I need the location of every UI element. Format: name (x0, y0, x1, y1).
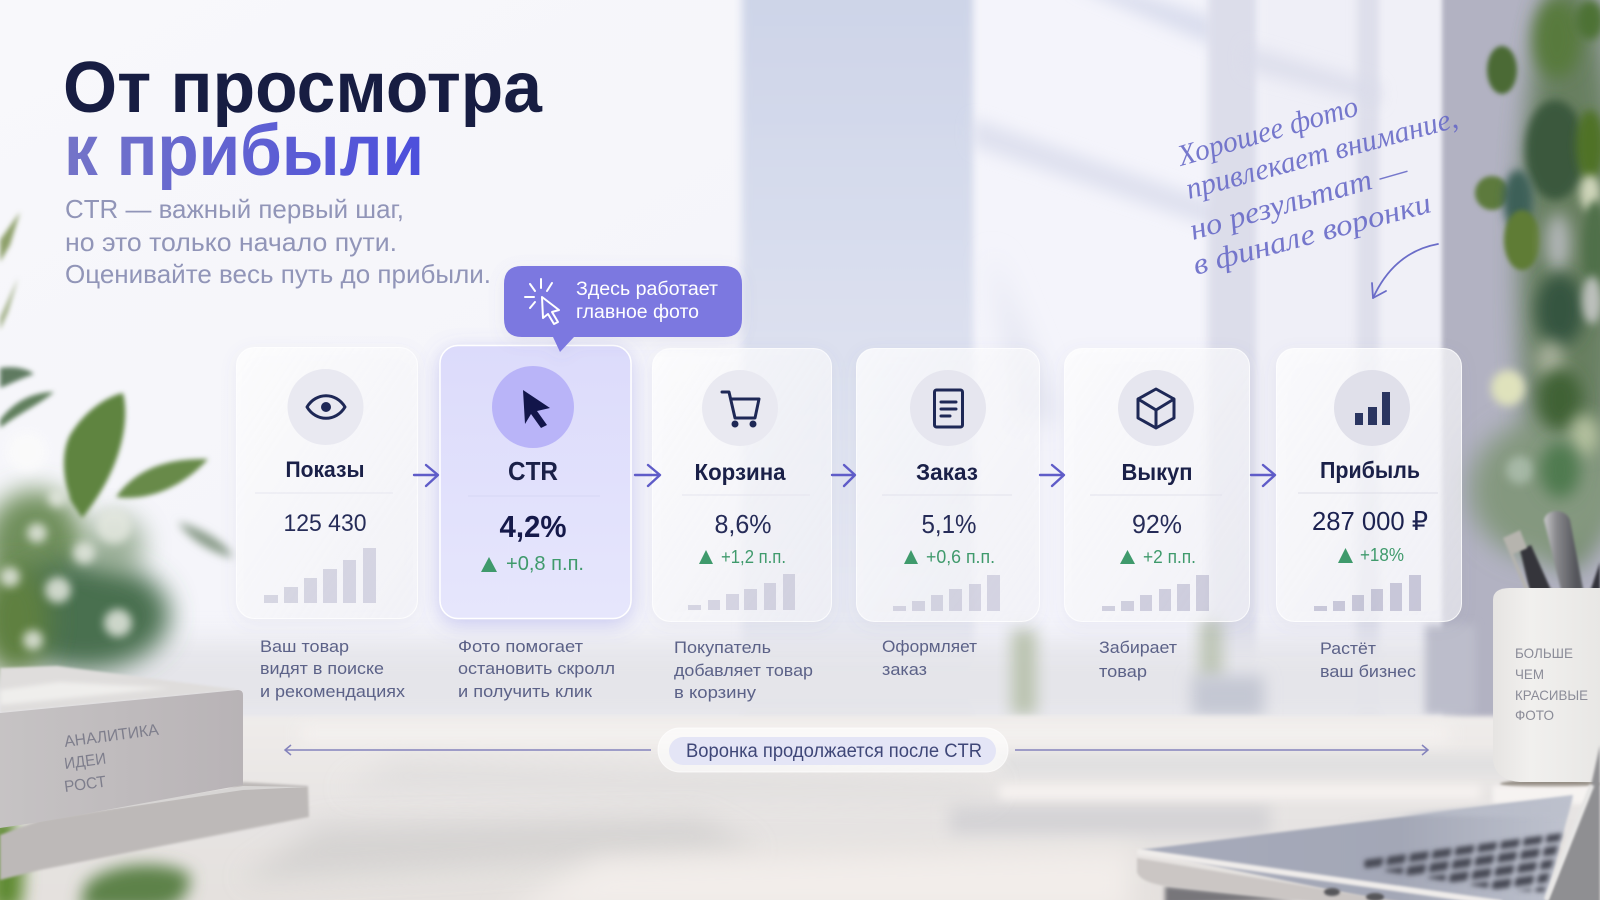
text: Корзина description: добавляет товар (674, 661, 813, 680)
card: Прибыль (1276, 348, 1462, 622)
icon: eye (288, 369, 364, 445)
icon: cursor (492, 366, 574, 448)
text: CTR description: и получить клик (458, 682, 593, 701)
arrow: Выкуп to Прибыль (1251, 465, 1275, 486)
delta: +0,8 п.п. (506, 553, 584, 575)
subtitle: Оценивайте весь путь до прибыли. (65, 259, 491, 289)
funnel continuation pill (658, 728, 1008, 772)
bar chart (1102, 575, 1209, 611)
table (0, 716, 1600, 900)
pen cup with pens (1493, 511, 1600, 804)
heading: Выкуп (1122, 459, 1192, 485)
callout: main photo: главное фото (576, 302, 699, 323)
book stack with spine labels (0, 666, 309, 880)
callout: main photo: Здесь работает (576, 279, 718, 300)
text: CTR description: остановить скролл (458, 659, 615, 678)
text: Показы description: видят в поиске (260, 659, 384, 678)
text: Показы description: Ваш товар (260, 637, 349, 656)
value: 8,6% (714, 509, 772, 539)
handwritten note: Хорошее фото (1173, 90, 1362, 173)
laptop (1137, 745, 1600, 900)
card: Заказ (856, 348, 1040, 622)
cup label text: КРАСИВЫЕ (1515, 687, 1588, 703)
heading: Показы (286, 457, 364, 482)
value: 125 430 (284, 510, 366, 537)
card: CTR highlighted (440, 346, 631, 618)
bottom-left blurred foliage (0, 805, 190, 900)
handwritten note: привлекает внимание, (1182, 101, 1461, 206)
icon: click burst (525, 279, 559, 324)
text: Прибыль description: ваш бизнес (1320, 662, 1417, 681)
delta: +18% (1360, 545, 1404, 565)
text: Прибыль description: Растёт (1320, 639, 1376, 658)
text: Выкуп description: Забирает (1099, 638, 1177, 657)
arrow: handwritten pointer (1372, 244, 1438, 298)
handwritten note (1173, 90, 1461, 282)
delta: +0,6 п.п. (926, 547, 995, 567)
funnel continuation pill: Воронка продолжается после CTR (686, 741, 982, 762)
value: 4,2% (500, 509, 566, 544)
icon: cart (702, 370, 778, 446)
handwritten note: в финале воронки (1189, 186, 1434, 282)
icon: document (910, 370, 986, 446)
value: 5,1% (922, 509, 976, 539)
arrow: Корзина to Заказ (832, 465, 855, 486)
icon: growth bars (1334, 370, 1410, 446)
arrow: CTR to Корзина (635, 465, 660, 486)
text: CTR description: Фото помогает (458, 637, 583, 656)
delta: +1,2 п.п. (721, 547, 786, 567)
book label text: АНАЛИТИКА (63, 722, 160, 751)
text: Заказ description: заказ (882, 660, 927, 679)
funnel continuation line left (285, 745, 651, 755)
right plant (1470, 0, 1600, 570)
cup label text: ЧЕМ (1515, 666, 1544, 682)
subtitle: но это только начало пути. (65, 227, 397, 257)
text: Корзина description: Покупатель (674, 638, 771, 657)
bar chart (688, 574, 795, 610)
bar chart (1314, 575, 1421, 611)
text: Показы description: и рекомендациях (260, 682, 406, 701)
funnel continuation line right (1015, 745, 1428, 755)
text: Заказ description: Оформляет (882, 637, 977, 656)
delta: +2 п.п. (1143, 547, 1196, 567)
title: к прибыли (64, 111, 424, 191)
book label text (63, 722, 160, 796)
subtitle: CTR — важный первый шаг, (65, 194, 404, 224)
card: Показы (236, 348, 418, 618)
card: Корзина (652, 348, 832, 622)
delta (1120, 547, 1196, 567)
handwritten note: но результат — (1186, 153, 1412, 247)
heading: CTR (508, 456, 558, 486)
title: От просмотра (63, 48, 543, 128)
callout: main photo (504, 266, 742, 352)
value: 287 000 ₽ (1312, 506, 1428, 536)
left plant (0, 212, 233, 675)
heading: Корзина (694, 459, 786, 485)
value: 92% (1132, 509, 1182, 539)
icon: box (1118, 370, 1194, 446)
cup label text: ФОТО (1515, 707, 1554, 723)
heading: Заказ (916, 459, 978, 485)
book label text: РОСТ (63, 774, 107, 796)
card: Выкуп (1064, 348, 1250, 622)
delta (1338, 545, 1404, 565)
book label text: ИДЕИ (63, 751, 107, 773)
arrow: Заказ to Выкуп (1040, 465, 1064, 486)
heading: Прибыль (1320, 457, 1420, 483)
bar chart (264, 548, 376, 603)
title (63, 48, 543, 191)
bar chart (893, 575, 1000, 611)
text: Корзина description: в корзину (674, 683, 757, 702)
mid-ground haze (0, 640, 1450, 730)
arrow: Показы to CTR (414, 465, 438, 486)
text: Выкуп description: товар (1099, 662, 1147, 681)
cup label text: БОЛЬШЕ (1515, 645, 1573, 661)
